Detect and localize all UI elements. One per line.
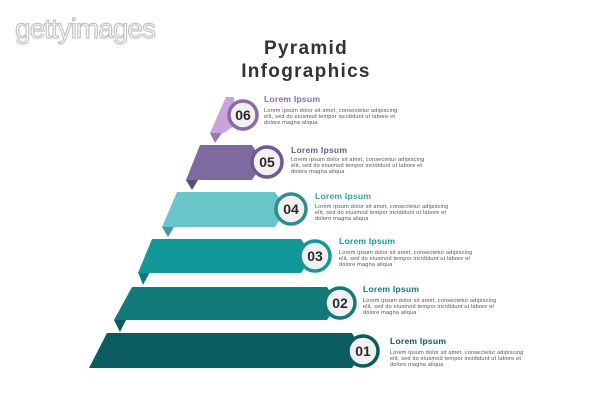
level 06: 06 xyxy=(235,107,251,123)
level 05 xyxy=(186,145,424,190)
level 03: Lorem ipsum dolor sit amet, consectetur adipiscing xyxy=(339,250,472,256)
level 05: elit, sed do eiusmod tempor incididunt ut labore et xyxy=(291,163,422,169)
title: Pyramid xyxy=(264,38,348,59)
level 04: Lorem Ipsum xyxy=(315,191,371,201)
level 02: Lorem ipsum dolor sit amet, consectetur adipiscing xyxy=(363,298,496,304)
level 02: dolore magna aliqua xyxy=(363,310,417,316)
title xyxy=(241,38,371,82)
level 06: Lorem ipsum dolor sit amet, consectetur adipiscing xyxy=(264,108,397,114)
level 04: Lorem ipsum dolor sit amet, consectetur adipiscing xyxy=(315,204,448,210)
level 02 xyxy=(114,284,496,332)
level 02: elit, sed do eiusmod tempor incididunt ut labore et xyxy=(363,304,494,310)
title: Infographics xyxy=(241,61,371,82)
level 06: dolore magna aliqua xyxy=(264,120,318,126)
level 01 xyxy=(89,333,523,368)
level 03: Lorem Ipsum xyxy=(339,236,395,246)
level 06: elit, sed do eiusmod tempor incididunt ut labore et xyxy=(264,114,395,120)
level 01: 01 xyxy=(355,343,371,359)
level 01: Lorem Ipsum xyxy=(390,336,446,346)
level 01: dolore magna aliqua xyxy=(390,362,444,368)
level 03: 03 xyxy=(307,248,323,264)
level 04: dolore magna aliqua xyxy=(315,216,369,222)
level 04 xyxy=(162,191,448,237)
level 03: elit, sed do eiusmod tempor incididunt ut labore et xyxy=(339,256,470,262)
level 06: Lorem Ipsum xyxy=(264,94,320,104)
watermark: gettyimages: gettyimages xyxy=(15,13,155,44)
level 05: dolore magna aliqua xyxy=(291,169,345,175)
level 04: elit, sed do eiusmod tempor incididunt ut labore et xyxy=(315,210,446,216)
level 01: Lorem ipsum dolor sit amet, consectetur adipiscing xyxy=(390,350,523,356)
level 03: dolore magna aliqua xyxy=(339,262,393,268)
level 04: 04 xyxy=(283,201,299,217)
level 01: elit, sed do eiusmod tempor incididunt ut labore et xyxy=(390,356,521,362)
level 06 xyxy=(210,94,397,143)
level 05: 05 xyxy=(259,154,275,170)
level 03 xyxy=(138,236,472,285)
level 05: Lorem ipsum dolor sit amet, consectetur adipiscing xyxy=(291,157,424,163)
level 02: Lorem Ipsum xyxy=(363,284,419,294)
level 05: Lorem Ipsum xyxy=(291,145,347,155)
level 02: 02 xyxy=(332,295,348,311)
